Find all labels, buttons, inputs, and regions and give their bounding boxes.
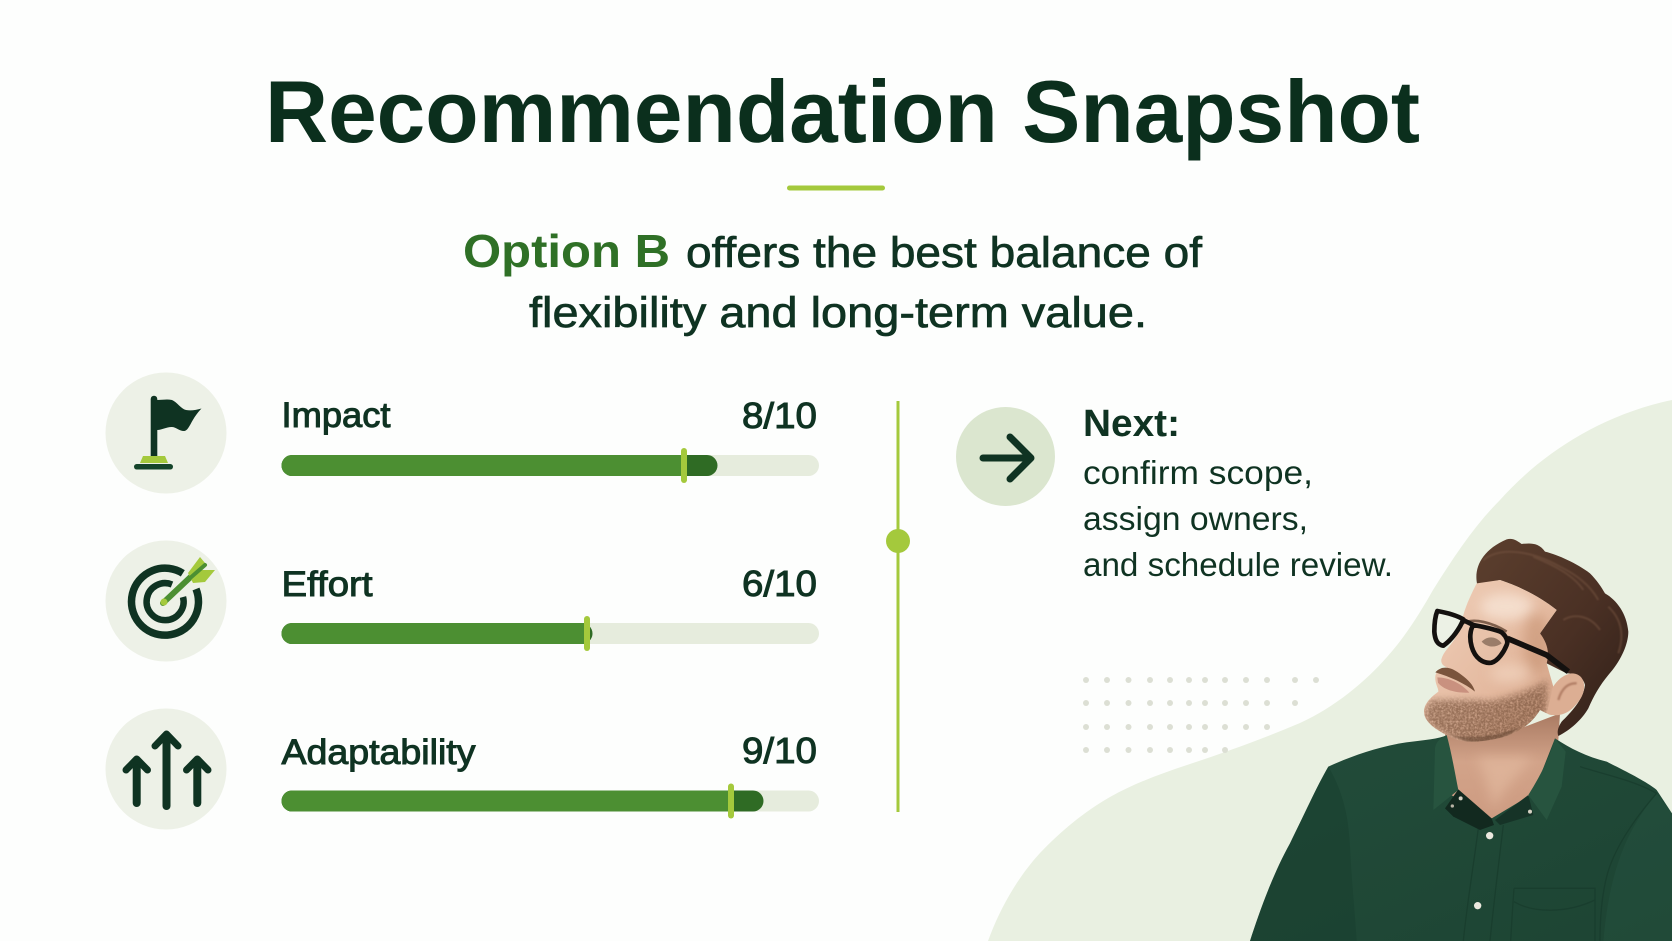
next steps text — [1083, 403, 1393, 583]
label: Adaptability: Adaptability — [282, 733, 476, 772]
subtitle — [463, 225, 1203, 337]
hair — [1476, 539, 1628, 736]
score: 9/10: 9/10 — [742, 730, 817, 771]
eye — [1482, 637, 1502, 647]
title divider — [787, 186, 885, 190]
bar: Adaptability 9/10 — [282, 784, 819, 818]
icon: target with arrow — [106, 540, 226, 662]
neck — [1445, 713, 1560, 822]
background blob — [988, 400, 1672, 941]
moustache and lips — [1435, 668, 1475, 693]
label: Impact: Impact — [282, 396, 391, 435]
shirt — [1250, 736, 1672, 941]
metric row: Adaptability — [106, 708, 819, 830]
subtitle line 2: flexibility and long-term value. — [529, 289, 1147, 337]
dot grid — [1083, 677, 1319, 753]
icon: flag — [106, 372, 226, 494]
hair strands — [1483, 552, 1621, 653]
shirt seams, placket and pocket — [1463, 767, 1657, 941]
face shading — [1480, 593, 1550, 683]
eyebrow — [1462, 621, 1507, 632]
person illustration — [1250, 539, 1672, 941]
sleeve shading — [1250, 767, 1357, 941]
metric row: Impact — [106, 372, 819, 494]
next line 2: assign owners, — [1083, 500, 1308, 537]
shirt collar — [1433, 735, 1566, 830]
next heading: Next: — [1083, 403, 1180, 445]
next line 1: confirm scope, — [1083, 454, 1313, 491]
subtitle highlight: Option B: Option B — [463, 225, 670, 277]
beard — [1423, 680, 1547, 743]
subtitle line 1: offers the best balance of — [686, 229, 1203, 277]
score: 8/10: 8/10 — [742, 395, 817, 436]
label: Effort: Effort — [282, 565, 373, 604]
bar: Impact 8/10 — [282, 448, 819, 483]
icon: next arrow — [956, 407, 1055, 506]
metric row: Effort — [106, 540, 819, 662]
vertical divider with dot — [886, 401, 910, 812]
ear — [1545, 673, 1584, 715]
shirt buttons — [1474, 832, 1493, 909]
face — [1424, 580, 1557, 742]
next line 3: and schedule review. — [1083, 546, 1393, 583]
glasses — [1434, 611, 1568, 672]
score: 6/10: 6/10 — [742, 563, 817, 604]
icon: three up arrows — [106, 708, 226, 830]
bar: Effort 6/10 — [282, 616, 819, 651]
title: Recommendation Snapshot — [265, 62, 1420, 161]
